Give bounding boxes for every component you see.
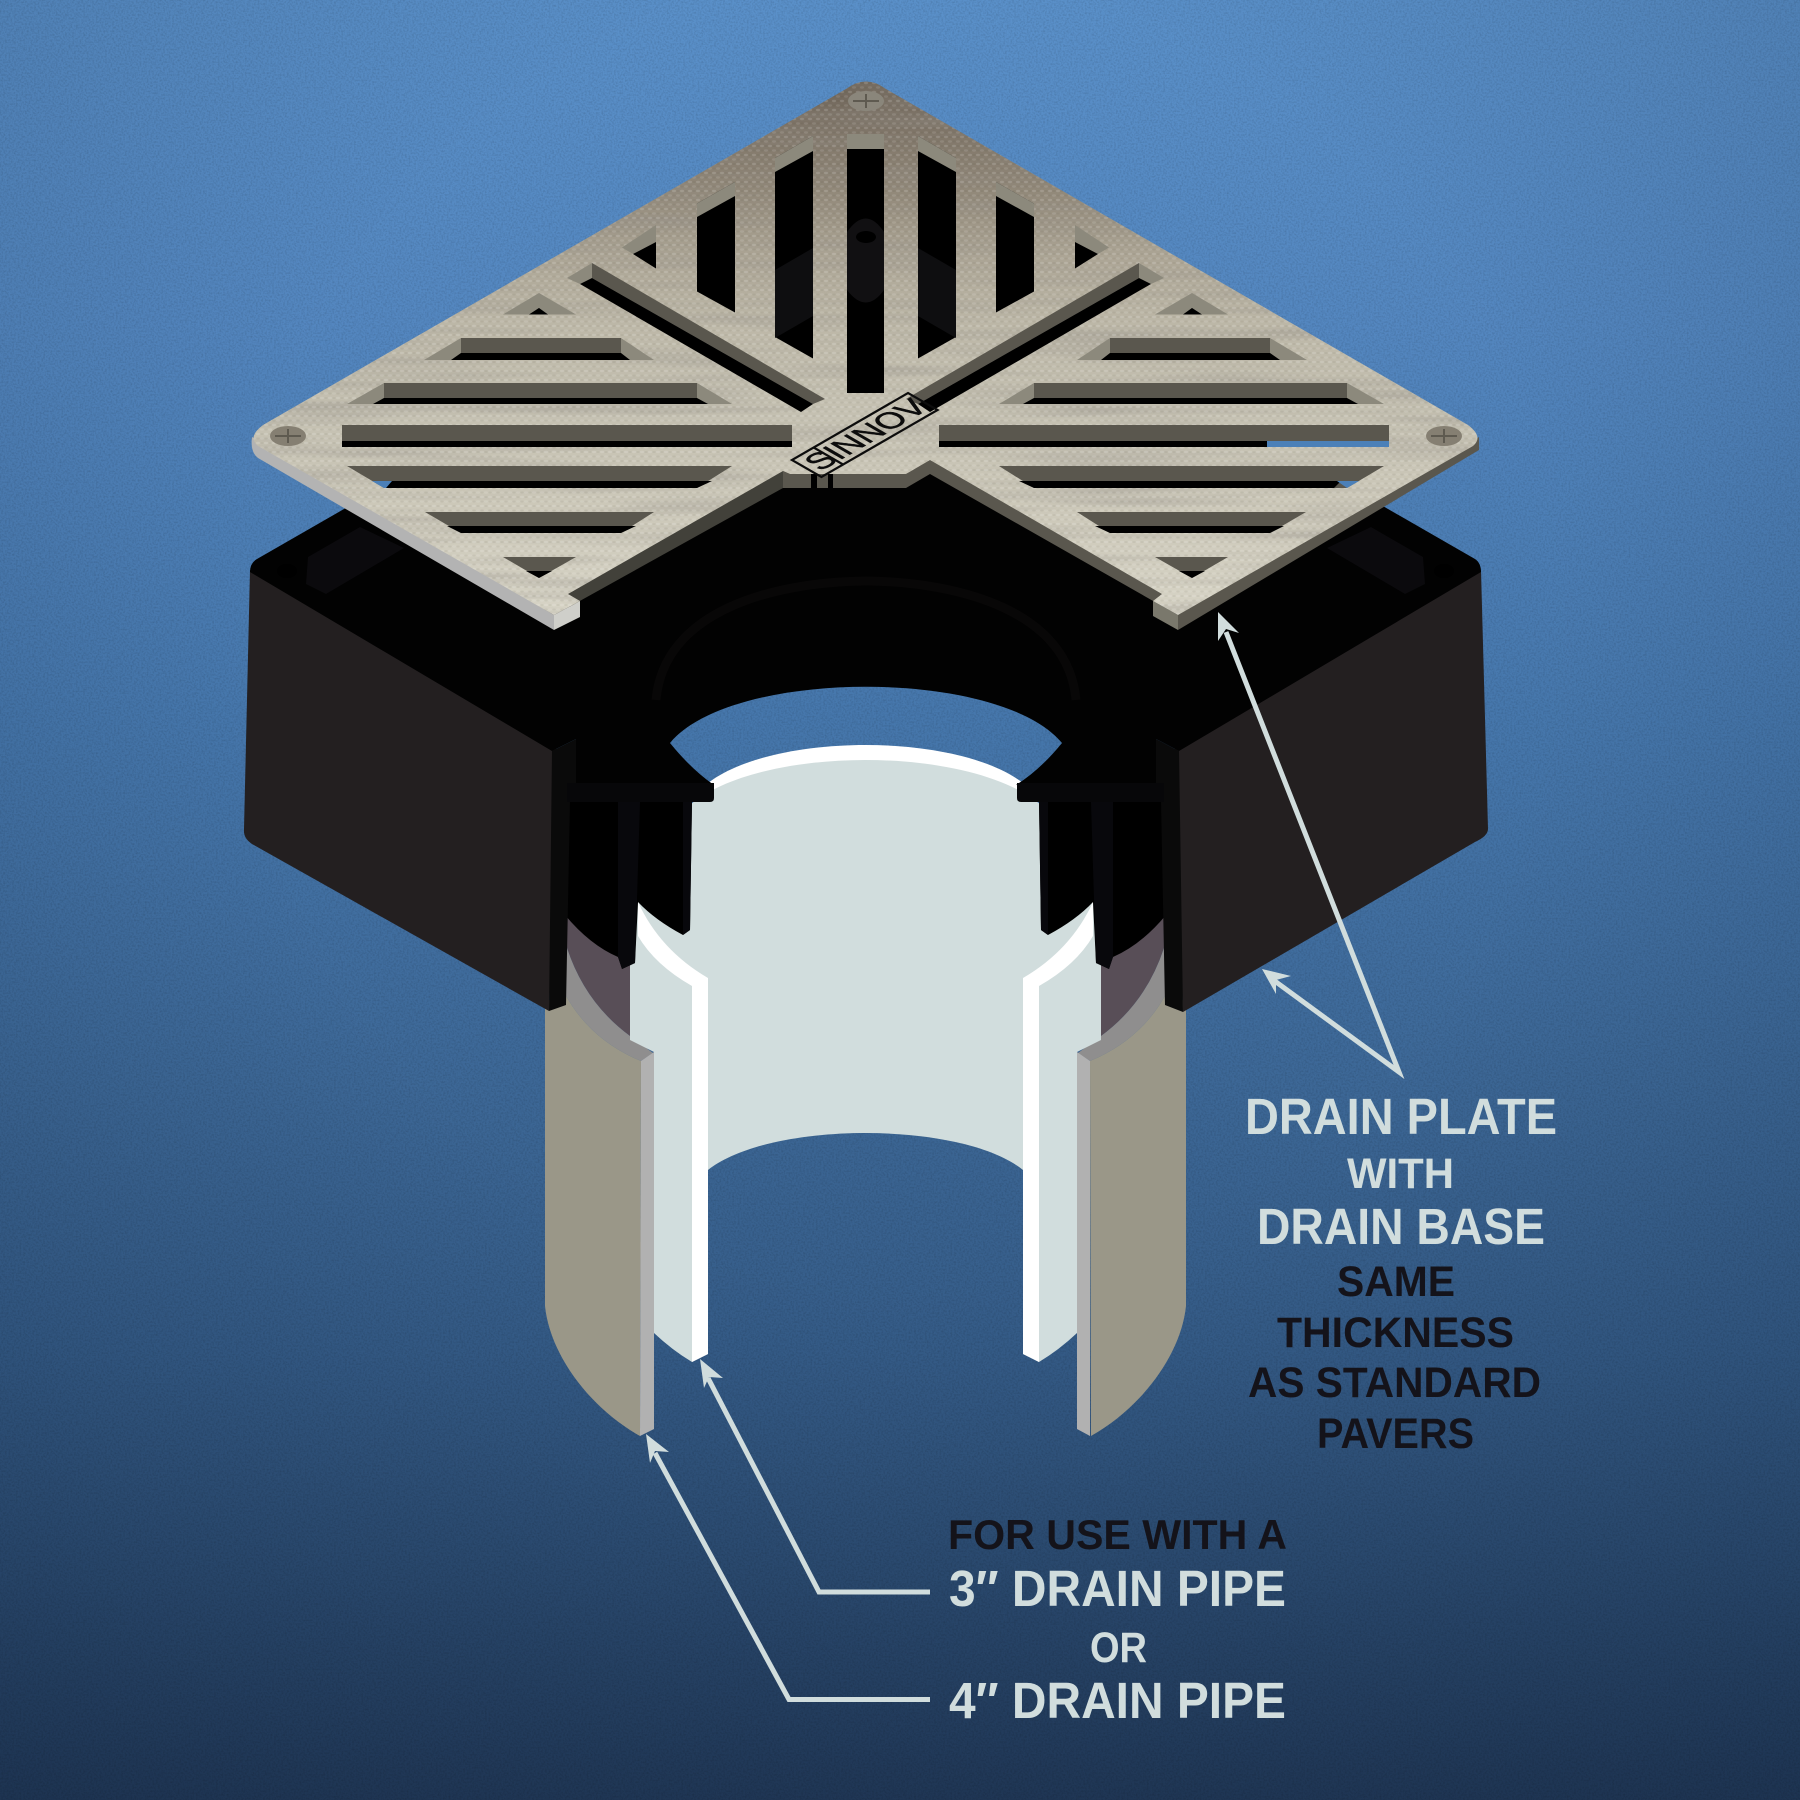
callout: pipe sizes: FOR USE WITH A <box>948 1511 1287 1558</box>
drain base mounting fins, right <box>1039 800 1166 969</box>
plate left tip edge <box>554 601 580 630</box>
callout: drain plate and base: PAVERS <box>1317 1410 1474 1458</box>
callout: pipe sizes: OR <box>1090 1624 1147 1672</box>
flange bars <box>567 783 714 802</box>
base top surface with drain opening <box>250 209 1481 785</box>
logo: SINNOV <box>795 394 936 475</box>
screw top <box>848 91 884 111</box>
base front corner strips <box>549 739 576 1011</box>
top wedge slots <box>622 134 1109 393</box>
plate top surface <box>240 70 1490 640</box>
corner recess right <box>1327 527 1425 594</box>
corner recess left <box>306 527 404 594</box>
callout: pipe sizes: 4″ DRAIN PIPE <box>949 1672 1286 1729</box>
callout: pipe sizes: 3″ DRAIN PIPE <box>949 1560 1286 1617</box>
outer 4 inch drain pipe, left half <box>545 900 654 1436</box>
callout: drain plate and base: AS STANDARD <box>1248 1359 1541 1407</box>
drain base mounting fins, left <box>565 800 692 969</box>
callout: drain plate and base <box>1245 1088 1557 1458</box>
plate inner edge left <box>568 468 783 607</box>
arrow to 4 inch pipe <box>646 1434 930 1700</box>
callout: drain plate and base: SAME <box>1337 1258 1455 1306</box>
diagonal slot right <box>906 263 1164 412</box>
callout: drain plate and base: WITH <box>1347 1150 1454 1198</box>
plate right thickness <box>1178 437 1479 630</box>
diagonal slot left <box>567 263 825 412</box>
callout: pipe sizes <box>948 1511 1287 1729</box>
arrowhead: base <box>1262 969 1291 994</box>
callout: drain plate and base: DRAIN BASE <box>1257 1198 1545 1255</box>
arrow to 3 inch pipe <box>700 1359 930 1592</box>
callout: drain plate and base: DRAIN PLATE <box>1245 1088 1557 1145</box>
screw left <box>270 426 306 446</box>
plate left thickness <box>252 437 554 630</box>
corner screw hole left <box>277 564 297 578</box>
plate logo notch lines <box>811 474 833 488</box>
inner 3 inch drain pipe <box>630 745 1101 1362</box>
plate right tip edge <box>1153 601 1178 630</box>
left wedge slots <box>342 293 792 578</box>
drain plate <box>240 70 1490 640</box>
arrows to drain plate and drain base <box>1218 612 1399 1072</box>
outer 4 inch drain pipe, right half <box>1077 900 1186 1436</box>
drain base <box>244 209 1488 1012</box>
right wedge slots <box>939 293 1389 578</box>
plate centre edge <box>783 458 1162 606</box>
drain opening rim <box>656 581 1076 700</box>
callout: drain plate and base: THICKNESS <box>1277 1309 1514 1357</box>
arrowhead: plate <box>1218 612 1239 641</box>
corner screw hole right <box>1434 564 1454 578</box>
screw right <box>1426 426 1462 446</box>
base left face <box>244 570 556 1011</box>
base right face <box>1175 570 1488 1012</box>
